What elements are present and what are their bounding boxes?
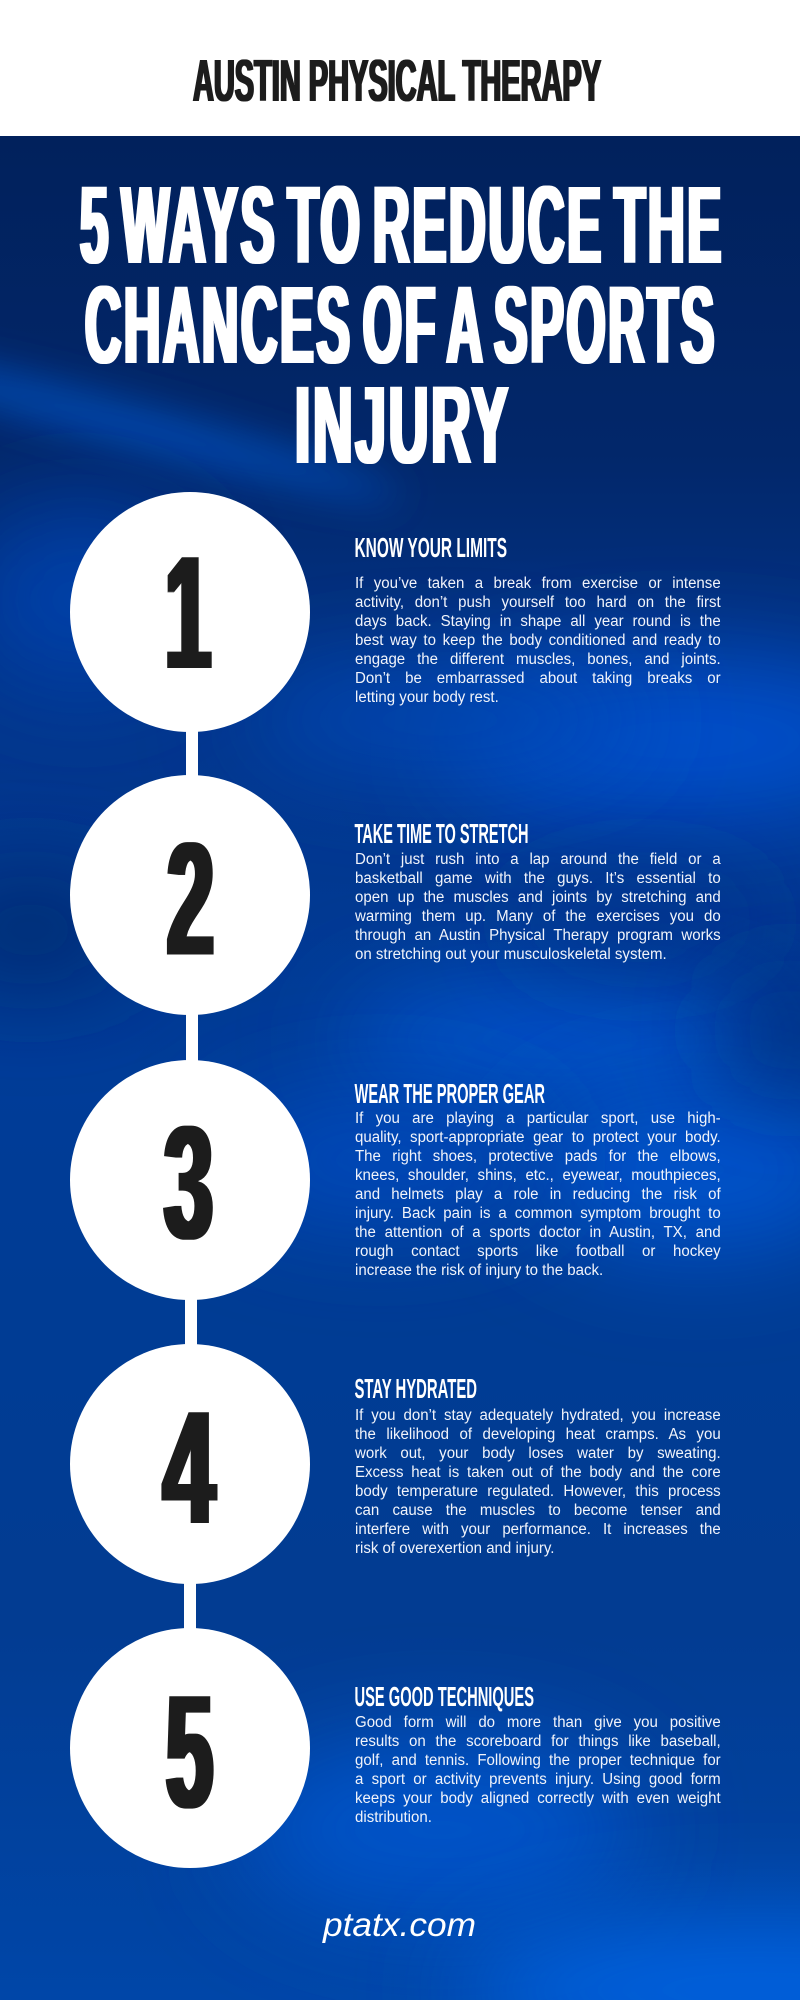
step 4 text: If you don’t stay adequately hydrated, you increase <box>354 1407 720 1424</box>
step 5 text: Good form will do more than give you positive <box>354 1714 720 1731</box>
step 1 text: activity, don’t push yourself too hard on the first <box>354 594 720 611</box>
step 2 number circle <box>70 775 310 1015</box>
step 3 number circle: 3 <box>164 1093 213 1273</box>
step 4 text: Excess heat is taken out of the body and the core <box>354 1464 720 1481</box>
step 4 text: work out, your body loses water by sweating. <box>354 1445 720 1462</box>
step 4 text: interfere with your performance. It increases the <box>354 1521 720 1538</box>
step 5 text: results on the scoreboard for things like baseball, <box>354 1733 720 1750</box>
step 2 number circle: 2 <box>167 810 214 990</box>
step 1 text: letting your body rest. <box>354 689 498 706</box>
step 3 heading: WEAR THE PROPER GEAR <box>354 1078 545 1109</box>
step 3 number circle <box>70 1060 310 1300</box>
step 3 text: knees, shoulder, shins, etc., eyewear, mouthpieces, <box>354 1167 720 1184</box>
step 3 text: If you are playing a particular sport, use high- <box>354 1110 720 1127</box>
step 4 number circle: 4 <box>163 1378 215 1558</box>
step 5 text: keeps your body aligned correctly with even weight <box>354 1790 720 1807</box>
step 1 text <box>354 575 721 706</box>
step 1 number circle: 1 <box>165 523 211 703</box>
step 1 text: engage the different muscles, bones, and joints. <box>354 651 720 668</box>
step 4 text: the likelihood of developing heat cramps. As you <box>354 1426 720 1443</box>
step 5 text: golf, and tennis. Following the proper technique for <box>354 1752 720 1769</box>
step 1 text: days back. Staying in shape all year round is the <box>354 613 720 630</box>
step 2 text: open up the muscles and joints by stretching and <box>354 889 720 906</box>
header band <box>0 0 800 136</box>
step 3 text: the attention of a sports doctor in Austin, TX, and <box>354 1224 720 1241</box>
step 1 text: best way to keep the body conditioned and ready to <box>354 632 720 649</box>
main title <box>80 164 724 480</box>
step 2 text: basketball game with the guys. It’s essential to <box>354 870 720 887</box>
step 2 text <box>354 851 721 963</box>
step 2 text: through an Austin Physical Therapy program works <box>354 927 720 944</box>
step 3 text: The right shoes, protective pads for the elbows, <box>354 1148 720 1165</box>
step 4 text: body temperature regulated. However, this process <box>354 1483 720 1500</box>
step 3 text: and helmets play a role in reducing the risk of <box>354 1186 720 1203</box>
step 5 number circle: 5 <box>166 1662 213 1842</box>
step 4 heading: STAY HYDRATED <box>354 1373 477 1404</box>
step 5 text: distribution. <box>354 1809 431 1826</box>
step 5 text: a sport or activity prevents injury. Using good form <box>354 1771 720 1788</box>
step 3 text: injury. Back pain is a common symptom brought to <box>354 1205 720 1222</box>
step 3 text: rough contact sports like football or hockey <box>354 1243 720 1260</box>
step 1 text: Don’t be embarrassed about taking breaks or <box>354 670 720 687</box>
step 3 text: increase the risk of injury to the back. <box>354 1262 603 1279</box>
step 2 text: warming them up. Many of the exercises you do <box>354 908 720 925</box>
step 4 text: risk of overexertion and injury. <box>354 1540 554 1557</box>
step 1 text: If you’ve taken a break from exercise or intense <box>354 575 720 592</box>
step 5 heading: USE GOOD TECHNIQUES <box>354 1681 534 1712</box>
step 1 number circle <box>70 492 310 732</box>
step 4 text: can cause the muscles to become tenser and <box>354 1502 720 1519</box>
step 3 text <box>354 1110 721 1279</box>
footer website: ptatx.com <box>322 1906 476 1943</box>
step 2 heading: TAKE TIME TO STRETCH <box>354 818 528 849</box>
step 4 text <box>354 1407 720 1557</box>
step 1 heading: KNOW YOUR LIMITS <box>354 532 507 563</box>
step 5 text <box>354 1714 721 1826</box>
step 2 text: on stretching out your musculoskeletal system. <box>354 946 666 963</box>
step 2 text: Don’t just rush into a lap around the field or a <box>354 851 720 868</box>
step 3 text: quality, sport-appropriate gear to protect your body. <box>354 1129 720 1146</box>
